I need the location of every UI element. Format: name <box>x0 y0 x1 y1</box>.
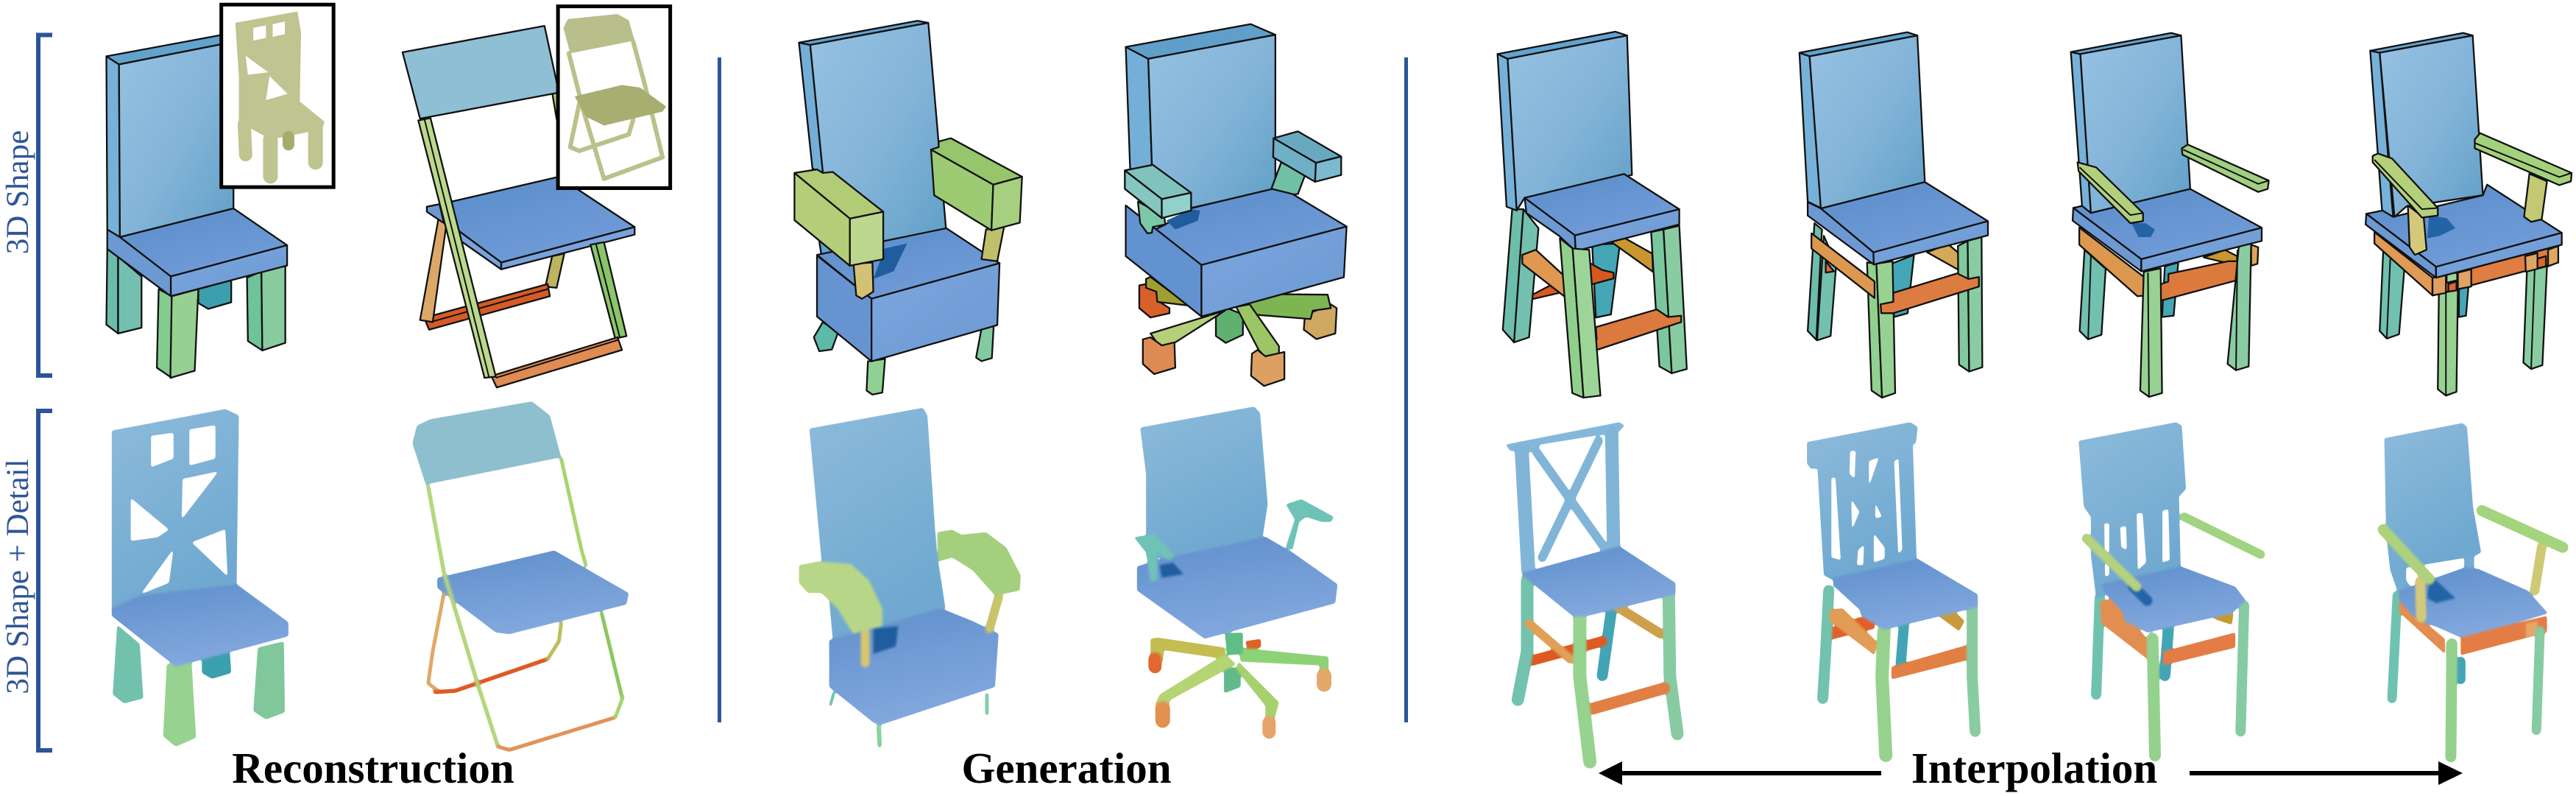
detail chair: curved arms <box>799 408 1021 745</box>
box chair: interpolation step 3 <box>2071 33 2269 397</box>
heading: Reconstruction: Reconstruction <box>232 744 514 792</box>
box chair: interpolation step 4 <box>2366 33 2572 395</box>
reconstruction: box chairs <box>107 26 634 387</box>
interpolation: detailed chairs 1 and 2 <box>1505 422 1978 762</box>
box chair: interpolation step 2 <box>1800 32 1988 398</box>
heading: Generation: Generation <box>961 744 1172 792</box>
divider between reconstruction and generation <box>718 57 721 722</box>
box chair: swivel <box>1125 24 1347 386</box>
detail chair: short slats with arms <box>2078 422 2261 756</box>
interpolation: detailed chairs 3 and 4 <box>2078 422 2563 757</box>
bracket: 3D Shape + Detail row <box>38 411 52 750</box>
row label: 3D Shape + Detail: 3D Shape + Detail <box>1 459 35 694</box>
row label: 3D Shape: 3D Shape <box>1 130 35 254</box>
detail chair: folding <box>412 401 629 750</box>
inset: point cloud of folding chair <box>558 7 670 189</box>
heading: Interpolation: Interpolation <box>1911 744 2157 792</box>
bracket: 3D Shape row <box>38 35 52 376</box>
box chair: interpolation step 1 <box>1498 32 1687 398</box>
detail chair: patterned back <box>112 409 289 747</box>
generation: box chairs <box>794 21 1347 395</box>
interpolation: box chairs 3 and 4 <box>2071 33 2572 397</box>
box chair: folding <box>403 26 634 387</box>
interpolation: box chairs 1 and 2 <box>1498 32 1988 398</box>
arrow: right <box>2190 761 2463 785</box>
reconstruction: detailed chairs <box>112 401 629 750</box>
generation: detailed chairs <box>799 406 1337 745</box>
box chair: tall back <box>107 34 287 378</box>
divider between generation and interpolation <box>1404 57 1408 722</box>
box chair: wide arms <box>794 21 1022 395</box>
inset: point cloud of tall back chair <box>222 4 333 187</box>
detail chair: slatted back <box>1807 422 1978 756</box>
detail chair: swivel <box>1134 406 1337 732</box>
detail chair: X back <box>1505 422 1677 762</box>
arrow: left <box>1599 761 1881 785</box>
detail chair: solid back with arms <box>2383 423 2563 757</box>
